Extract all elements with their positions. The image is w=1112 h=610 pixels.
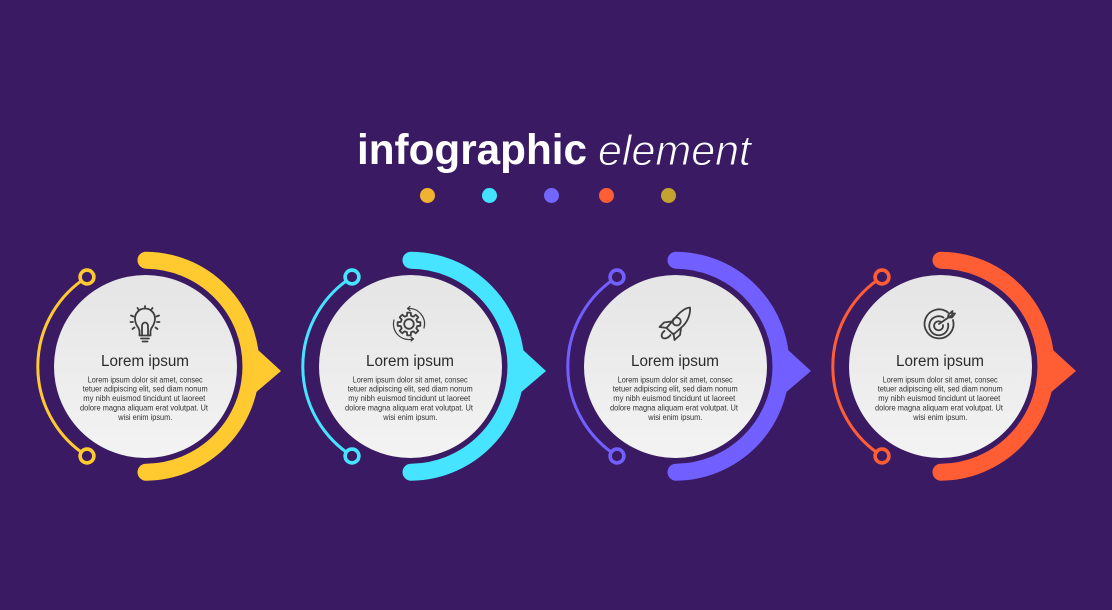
icon: target with arrow bbox=[925, 309, 955, 338]
thick arc with arrow bbox=[146, 260, 281, 472]
heading: Lorem ipsum bbox=[896, 353, 984, 370]
thin arc with ring nodes bbox=[303, 270, 359, 463]
body text bbox=[345, 374, 474, 422]
thin arc with ring nodes bbox=[833, 270, 889, 463]
body text: Lorem ipsum dolor sit amet, consec bbox=[88, 374, 203, 384]
thin arc with ring nodes bbox=[38, 270, 94, 463]
grey disc bbox=[584, 275, 767, 458]
panel: step 2 cyan bbox=[303, 260, 546, 472]
thin arc with ring nodes bbox=[568, 270, 624, 463]
icon: gear with circular arrows bbox=[393, 306, 425, 341]
grey disc bbox=[54, 275, 237, 458]
title bbox=[357, 126, 753, 175]
body text: wisi enim ipsum. bbox=[117, 412, 172, 422]
panel: step 1 yellow bbox=[38, 260, 281, 472]
heading: Lorem ipsum bbox=[631, 353, 719, 370]
body text: my nibh euismod tincidunt ut laoreet bbox=[878, 393, 1001, 403]
title: infographic bbox=[357, 126, 587, 174]
colour dots row bbox=[420, 188, 676, 203]
body text: dolore magna aliquam erat volutpat. Ut bbox=[345, 402, 474, 412]
body text: Lorem ipsum dolor sit amet, consec bbox=[353, 374, 468, 384]
body text: wisi enim ipsum. bbox=[912, 412, 967, 422]
panel: step 4 orange bbox=[833, 260, 1076, 472]
body text bbox=[875, 374, 1004, 422]
body text: my nibh euismod tincidunt ut laoreet bbox=[83, 393, 206, 403]
icon: light bulb bbox=[130, 306, 160, 342]
body text: my nibh euismod tincidunt ut laoreet bbox=[348, 393, 471, 403]
body text: tetuer adipiscing elit, sed diam nonum bbox=[613, 384, 738, 394]
heading: Lorem ipsum bbox=[366, 353, 454, 370]
body text: dolore magna aliquam erat volutpat. Ut bbox=[610, 402, 739, 412]
body text: wisi enim ipsum. bbox=[647, 412, 702, 422]
thick arc with arrow bbox=[941, 260, 1076, 472]
body text: tetuer adipiscing elit, sed diam nonum bbox=[83, 384, 208, 394]
body text: my nibh euismod tincidunt ut laoreet bbox=[613, 393, 736, 403]
body text: dolore magna aliquam erat volutpat. Ut bbox=[80, 402, 209, 412]
body text: Lorem ipsum dolor sit amet, consec bbox=[883, 374, 998, 384]
body text bbox=[610, 374, 739, 422]
grey disc bbox=[319, 275, 502, 458]
thick arc with arrow bbox=[411, 260, 546, 472]
grey disc bbox=[849, 275, 1032, 458]
title: element bbox=[598, 127, 753, 175]
heading: Lorem ipsum bbox=[101, 353, 189, 370]
body text: dolore magna aliquam erat volutpat. Ut bbox=[875, 402, 1004, 412]
body text bbox=[80, 374, 209, 422]
body text: tetuer adipiscing elit, sed diam nonum bbox=[878, 384, 1003, 394]
body text: wisi enim ipsum. bbox=[382, 412, 437, 422]
body text: tetuer adipiscing elit, sed diam nonum bbox=[348, 384, 473, 394]
panel: step 3 violet bbox=[568, 260, 811, 472]
icon: rocket bbox=[660, 308, 690, 340]
thick arc with arrow bbox=[676, 260, 811, 472]
body text: Lorem ipsum dolor sit amet, consec bbox=[618, 374, 733, 384]
